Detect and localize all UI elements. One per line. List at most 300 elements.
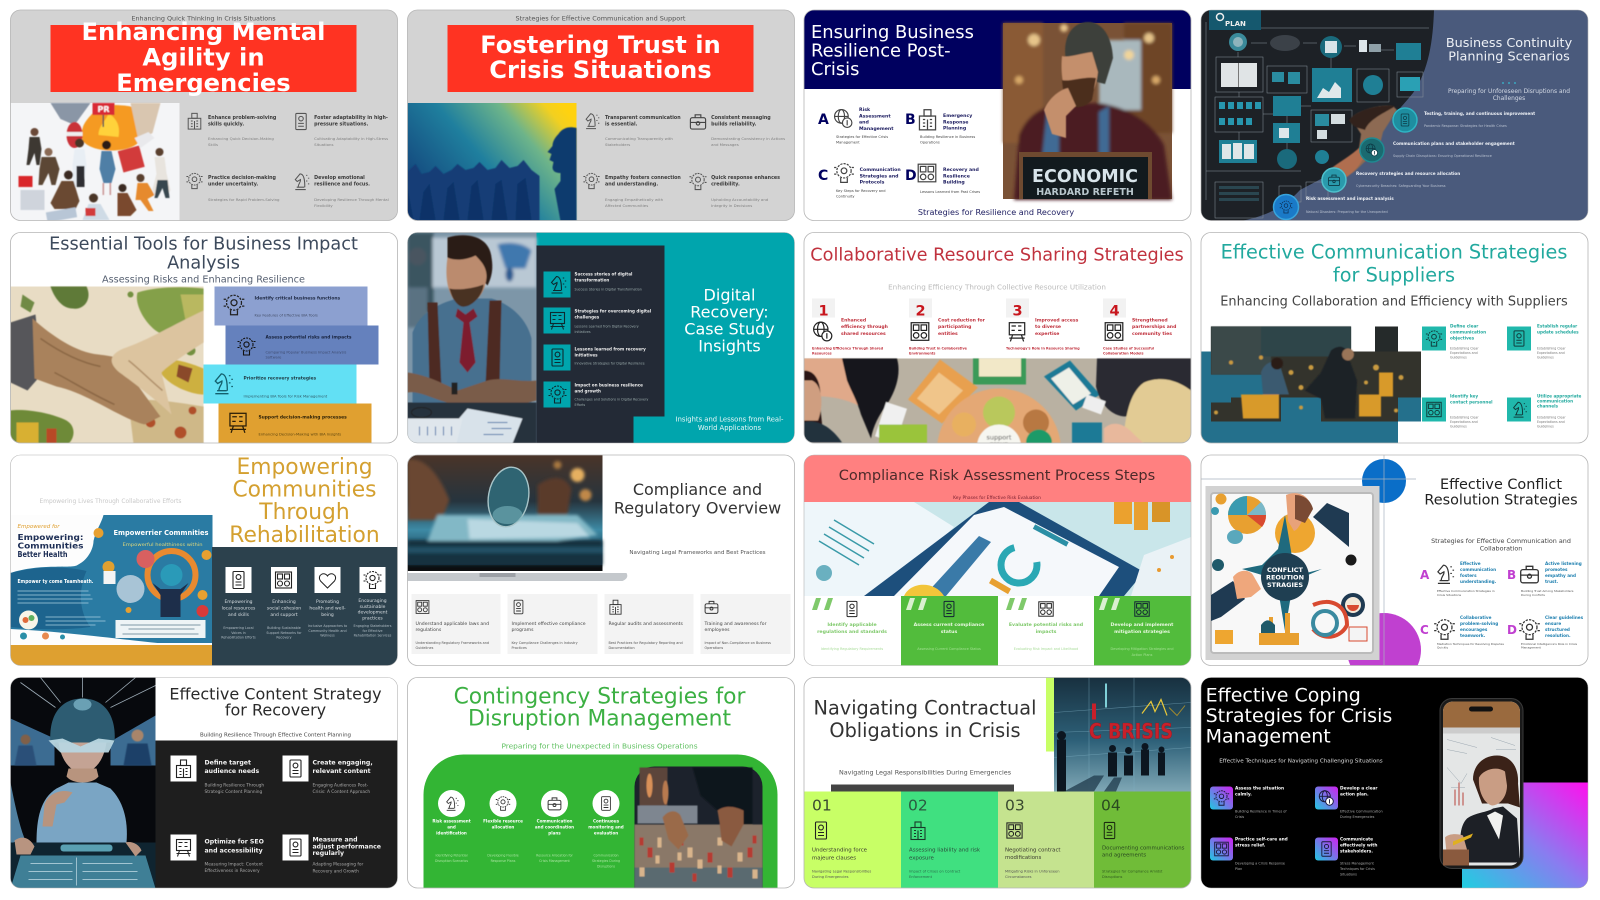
item: success stories: Success Stories in Digital Transformation: [574, 288, 642, 292]
item: flexible resources: allocation: [492, 824, 514, 830]
item: transparent communication: Communicating Transparently with: [605, 136, 673, 141]
item: contact personnel: Guidelines: [1450, 424, 1467, 428]
item: lessons learned: Lessons learned from recovery: [574, 346, 646, 352]
step: identify critical functions: Key Features of Effective BIA Tools: [254, 314, 318, 318]
item: communicate: stakeholders.: [1340, 848, 1373, 854]
item 1: Enhanced: [841, 318, 866, 324]
item: SEO: Measuring Impact: Content: [204, 862, 263, 868]
item: lessons learned: [544, 344, 646, 370]
illustration: tablet and documents: [804, 502, 1191, 596]
item: local resources: Empowering: [224, 599, 253, 605]
item: emotional resilience: [295, 174, 389, 208]
item B: [905, 110, 975, 144]
item: problem solving: [188, 113, 277, 147]
item: risk assessment: Natural Disasters: Preparing for the Unexpected: [1306, 210, 1388, 214]
step: support decisions: Support decision-making processes: [258, 414, 347, 420]
step: assess risks: Assess potential risks and impacts: [266, 334, 352, 340]
header: Compliance Risk Assessment Process Steps: [839, 468, 1155, 484]
item: engaging content: relevant content: [312, 768, 371, 775]
item: communication plans: Supply Chain Disruptions: Ensuring Operational Resilience: [1393, 154, 1492, 158]
item A: communication: [1460, 567, 1496, 572]
item: communication plans: plans: [548, 830, 561, 836]
item: emotional resilience: Developing Resilience Through Mental: [314, 197, 389, 202]
item: communicate: Situations: [1340, 872, 1357, 876]
item: appropriate channels: [1507, 394, 1582, 428]
title: Planning Scenarios: [1448, 50, 1570, 65]
poster: Empowerrier Commnities: [114, 529, 208, 537]
photo: worried man: ECONOMIC: [1032, 167, 1138, 187]
item 2: 2: [915, 304, 926, 320]
col 01: Understanding force: [812, 848, 868, 854]
navy header with title: Ensuring Business: [811, 22, 974, 43]
item: testing: Testing, training, and continuous improvement: [1424, 111, 1535, 116]
title: Rehabilitation: [229, 523, 380, 548]
item: update schedules: Establish regular: [1537, 324, 1578, 328]
photo: team around table: group: [990, 440, 1008, 448]
card 14: Contingency Strategies: [408, 678, 794, 888]
item: communicate: Techniques for Crisis: [1339, 867, 1375, 871]
item: recovery strategies: Cybersecurity Breaches: Safeguarding Your Business: [1356, 184, 1446, 188]
title banner: [50, 18, 356, 97]
item: risk assessment: and: [447, 824, 456, 830]
item: lessons learned: initiatives: [574, 352, 598, 357]
item: overcoming challenges: challenges: [574, 314, 600, 319]
item 2: Building Trust in Collaborative: [909, 346, 968, 350]
card: applicable laws: Understand applicable laws and: [416, 621, 489, 627]
subtitle: Empowering Lives Through Collaborative Efforts: [39, 499, 182, 505]
item: health: health and well-: [309, 605, 346, 611]
item 2: participating: [938, 324, 971, 330]
item 4: Collaboration Models: [1103, 352, 1143, 356]
title: Recovery:: [690, 302, 769, 322]
navy header with title: Resilience Post-: [811, 41, 951, 62]
item: update schedules: Guidelines: [1537, 356, 1554, 360]
item A: [1420, 561, 1497, 597]
item: appropriate channels: communication: [1537, 398, 1573, 404]
item: appropriate channels: Guidelines: [1537, 424, 1554, 428]
item C: [1420, 615, 1504, 650]
item: impact: Efforts: [574, 403, 586, 407]
item A: Strategies for Effective Crisis: [836, 135, 888, 139]
item: problem solving: Enhancing Quick Decision-Making: [208, 136, 274, 141]
item: testing: Pandemic Response: Strategies for Health Crises: [1424, 124, 1507, 128]
item: sustainable development: Rehabilitation Services: [354, 634, 392, 638]
col 04: Documenting communications: [1102, 846, 1185, 852]
item: sustainable development: Engaging Stakeholders: [354, 624, 392, 628]
item: sustainable development: Encouraging: [358, 598, 387, 604]
subtitle: Strategies for Resilience and Recovery: [918, 207, 1074, 217]
item 1: [812, 298, 888, 356]
item B: Operations: [920, 140, 940, 144]
item: consistent messaging: builds reliability.: [711, 122, 757, 128]
item C: C: [818, 168, 828, 184]
item B: Emergency: [943, 113, 972, 119]
dark chalkboard flow chart: [1201, 10, 1434, 221]
item D: Building: [943, 180, 965, 186]
item: risk assessment: identification: [436, 830, 467, 836]
item D: Lessons Learned from Past Crises: [920, 190, 980, 194]
item: define audience: Strategic Content Planning: [204, 789, 263, 795]
illustration: crisis scene: [10, 103, 180, 222]
item A: Management: [836, 140, 860, 144]
item: overcoming challenges: [544, 308, 652, 334]
step: support decisions: Enhancing Decision-Making with BIA Insights: [258, 432, 341, 436]
title: Contingency Strategies for: [454, 684, 745, 710]
title banner: Emergencies: [116, 69, 291, 97]
item C: Collaborative: [1460, 615, 1492, 620]
item: define objectives: communication: [1450, 330, 1486, 334]
item: assess calmly: Crisis: [1235, 815, 1244, 819]
item: self care: stress relief.: [1235, 842, 1266, 848]
item: assess calmly: [1210, 786, 1287, 819]
item: transparent communication: [586, 114, 681, 147]
item: consistent messaging: Demonstrating Consistency in Actions: [711, 136, 785, 141]
item B: trust.: [1545, 579, 1559, 584]
col 02: Enforcement: [909, 875, 933, 879]
item: communicate: Communicate: [1340, 836, 1373, 842]
item: overcoming challenges: Lessons Learned from Digital Recovery: [574, 324, 639, 328]
step: mitigate: Developing Mitigation Strategies and: [1110, 647, 1174, 651]
title: Effective Communication Strategies: [1221, 240, 1567, 264]
item D: Management: [1521, 646, 1542, 650]
item: measure: regularly: [312, 850, 344, 857]
step: assess: Assessing Current Compliance Status: [917, 647, 981, 651]
item: empathy: Empathy fosters connection: [605, 175, 681, 181]
item: health: being: [321, 612, 334, 618]
item D: resolution.: [1545, 633, 1571, 638]
col 02: exposure: [909, 856, 934, 862]
step: identify critical functions: [214, 286, 368, 326]
decorative circles: [1347, 459, 1421, 687]
col 01: [804, 792, 901, 888]
teal block: [1201, 352, 1398, 444]
item D: [905, 164, 980, 194]
step: evaluate: [998, 596, 1094, 666]
item: emotional resilience: Flexibility: [314, 203, 333, 208]
item A: and: [859, 120, 869, 126]
card: compliance programs: Key Compliance Challenges in Industry: [512, 641, 578, 645]
item: quick response: credibility.: [711, 182, 740, 188]
item: sustainable development: for Effective: [363, 629, 382, 633]
step: evaluate: impacts: [1036, 629, 1057, 635]
item: risk assessment: [432, 790, 471, 863]
item: contact personnel: Establishing Clear: [1450, 416, 1479, 420]
item: communication plans: and coordination: [535, 824, 574, 830]
illustration: crisis scene: PR: [98, 105, 110, 114]
card 15: Navigating Contractual Obligations: [804, 678, 1191, 888]
item: communicate: Stress Management: [1340, 862, 1375, 866]
item: define audience: Building Resilience Through: [204, 782, 264, 788]
item: sustainable development: practices: [362, 615, 383, 621]
item: lessons learned: Innovative Strategies for Digital Resilience: [574, 362, 645, 366]
card 13: Effective Content Strategy: [10, 678, 398, 888]
subtitle: World Applications: [698, 424, 762, 432]
item: health: Wellness: [320, 634, 335, 638]
item: sustainable development: [354, 567, 392, 638]
title banner: Enhancing Mental: [82, 18, 325, 46]
photo: team around table: [804, 358, 1191, 512]
photo: stressed man at desk: [408, 232, 536, 444]
item: SEO: and accessibility: [204, 848, 263, 854]
item: appropriate channels: Expectations and: [1537, 420, 1565, 424]
item: define objectives: [1422, 324, 1486, 360]
item: success stories: Success stories of digital: [574, 272, 633, 276]
item 1: Resources: [812, 352, 832, 356]
step: prioritize recovery: [204, 364, 356, 404]
item: social cohesion: and support: [270, 612, 298, 618]
step: assess: [901, 596, 998, 666]
subtitle: Enhancing Collaboration and Efficiency with Suppliers: [1220, 294, 1568, 310]
item: self care: [1210, 836, 1288, 871]
item A: Risk: [859, 107, 871, 113]
card: training: employees: [704, 627, 730, 633]
item: communication plans: [535, 790, 574, 863]
item: define audience: Define target: [204, 760, 251, 766]
title banner: Agility in: [142, 44, 265, 72]
item 4: community ties: [1132, 331, 1172, 337]
photo: meeting puzzle: [1211, 326, 1421, 422]
item: risk assessment: Risk assessment and impact analysis: [1306, 196, 1394, 201]
item: decision making: [186, 173, 280, 202]
title: Business Continuity: [1446, 36, 1573, 51]
card: compliance programs: [508, 594, 598, 654]
item C: Protocols: [860, 180, 885, 186]
item 3: 3: [1012, 304, 1023, 320]
item: monitoring: Continuous: [593, 818, 620, 824]
poster: [1206, 486, 1380, 660]
step: evaluate: Evaluate potential risks and: [1009, 622, 1083, 628]
item: social cohesion: [266, 567, 302, 640]
step: prioritize recovery: Implementing BIA Tools for Risk Management: [244, 394, 328, 398]
item 3: to diverse: [1035, 324, 1061, 330]
poster: Empower ty come Teamheath.: [18, 579, 94, 585]
card 8: Effective Communication for Suppliers: [1201, 232, 1588, 444]
item: self care: Practice self-care and: [1235, 836, 1288, 842]
item 2: Cost reduction for: [938, 318, 986, 324]
title banner: Fostering Trust in: [480, 31, 721, 59]
item 4: partnerships and: [1132, 324, 1176, 330]
title: Through: [258, 500, 350, 525]
subtitle: Building Resilience Through Effective Content Planning: [200, 732, 351, 738]
title: Regulatory Overview: [614, 498, 781, 517]
title: Analysis: [167, 254, 240, 274]
title: Insights: [698, 336, 761, 356]
subtitle: Preparing for Unforeseen Disruptions and: [1448, 89, 1570, 95]
item: local resources: Rehabilitation Efforts: [221, 636, 256, 640]
item 2: entities: [938, 331, 958, 337]
item: local resources: [221, 567, 256, 640]
dark panel: [156, 740, 398, 888]
item: success stories: [544, 272, 642, 298]
card 2: Fostering Trust: [408, 10, 794, 226]
item D: Clear guidelines: [1545, 615, 1584, 620]
item: risk assessment: Identifying Potential: [436, 854, 468, 858]
item: define objectives: Define clear: [1450, 324, 1479, 328]
item: decision making: Practice decision-making: [208, 175, 277, 181]
title banner: [448, 25, 754, 92]
item: define audience: audience needs: [204, 768, 259, 775]
card: compliance programs: Practices: [512, 646, 527, 650]
item: measure: Measure and: [312, 836, 358, 844]
subtitle: Preparing for the Unexpected in Business Operations: [501, 742, 698, 750]
item: contact personnel: Identify key: [1450, 394, 1478, 398]
item: local resources: local resources: [222, 605, 256, 611]
card 3: Ensuring Business Resilience: [804, 10, 1191, 221]
step: identify: regulations and standards: [817, 629, 887, 635]
step: assess risks: Comparing Popular Business Impact Analysis: [266, 350, 346, 354]
item: health: Community Health and: [308, 629, 347, 633]
item: monitoring: Disruptions: [597, 864, 615, 868]
item C: Communication: [860, 167, 901, 173]
navy header with title: Crisis: [811, 59, 859, 80]
subtitle: Navigating Legal Responsibilities During Emergencies: [839, 768, 1012, 776]
dots: [1502, 82, 1516, 84]
title: Management: [1206, 726, 1331, 748]
col 03: [998, 792, 1094, 888]
item: define objectives: Guidelines: [1450, 356, 1467, 360]
item: adaptability: pressure situations.: [314, 122, 369, 128]
item: communicate: effectively with: [1340, 842, 1377, 848]
card 12: Effective Conflict Resolution: [1201, 455, 1588, 687]
step: assess risks: [226, 326, 378, 364]
item: contact personnel: contact personnel: [1450, 400, 1493, 404]
poster: CONFLICT: [1267, 566, 1304, 574]
item A: [818, 107, 894, 144]
card 10: Compliance and Regulatory: [408, 455, 794, 666]
item: transparent communication: Stakeholders: [605, 142, 630, 147]
col 02: [901, 792, 998, 888]
item: action plan: Effective Communication: [1340, 810, 1383, 814]
photo: worried man: HARDARD REFETH: [1036, 187, 1134, 198]
title: Communities: [232, 478, 377, 503]
item D: ensure: [1545, 621, 1561, 626]
item: SEO: Optimize for SEO: [204, 838, 264, 846]
step: assess risks: Software: [266, 355, 282, 359]
item: update schedules: [1507, 324, 1579, 360]
lime accent bar: [1046, 678, 1054, 752]
item 1: efficiency through: [841, 324, 888, 330]
item: problem solving: Enhance problem-solving: [208, 115, 277, 121]
item: problem solving: skills quickly.: [208, 122, 244, 128]
item A: A: [1420, 568, 1430, 582]
item A: Management: [859, 126, 894, 132]
item: monitoring: monitoring and: [588, 824, 624, 830]
item B: [1507, 561, 1582, 597]
item: engaging content: Crisis: A Content Approach: [312, 789, 370, 795]
item: define objectives: Establishing Clear: [1450, 346, 1479, 350]
item C: Quickly: [1437, 646, 1448, 650]
item C: Mediation Techniques for Resolving Disputes: [1437, 642, 1504, 646]
item B: Active listening: [1545, 561, 1582, 566]
subtitle: Enhancing Quick Thinking in Crisis Situations: [131, 14, 276, 22]
item: emotional resilience: resilience and focus.: [314, 182, 370, 188]
col 04: Strategies for Compliance Amidst: [1102, 870, 1163, 874]
gradient block: [1462, 782, 1588, 888]
item 2: Environments: [909, 352, 935, 356]
item: adaptability: Cultivating Adaptability in High-Stress: [314, 136, 388, 141]
item: flexible resources: [483, 790, 523, 863]
photo: crisis graphic: [1054, 678, 1191, 792]
item: testing: [1393, 108, 1535, 132]
card: training: Operations: [704, 646, 723, 650]
title: Compliance and: [633, 480, 762, 499]
item: quick response: Integrity in Decisions: [711, 203, 752, 208]
item: engaging content: Create engaging,: [312, 760, 373, 766]
dark chalkboard flow chart: PLAN: [1225, 20, 1246, 28]
item: adaptability: [296, 113, 388, 147]
item 3: [1006, 298, 1080, 350]
card 6: Digital Recovery: [408, 232, 794, 444]
card: training: Training and awareness for: [704, 621, 767, 627]
item: impact: and growth: [574, 388, 601, 393]
item 3: Technology's Role in Resource Sharing: [1006, 346, 1080, 350]
card: compliance programs: Implement effective compliance: [512, 621, 586, 627]
col 03: 03: [1005, 796, 1025, 814]
photo: woman with visor: [10, 678, 156, 888]
item: risk assessment: Disruption Scenarios: [435, 859, 468, 863]
poster: STRAGIES: [1267, 581, 1303, 589]
step: prioritize recovery: Prioritize recovery strategies: [244, 376, 316, 382]
card: audits: Best Practices for Regulatory Reporting and: [608, 641, 683, 645]
item B: empathy and: [1545, 573, 1576, 578]
item: update schedules: Expectations and: [1537, 351, 1565, 355]
item B: B: [905, 112, 916, 128]
item 4: 4: [1109, 304, 1120, 320]
item: recovery strategies: Recovery strategies and resource allocation: [1356, 171, 1460, 176]
item A: fosters: [1460, 573, 1477, 578]
item B: B: [1507, 568, 1516, 582]
item B: Response: [943, 119, 968, 125]
item D: [1507, 615, 1584, 650]
item: action plan: Develop a clear: [1340, 786, 1378, 792]
step: identify: Identify applicable: [827, 622, 877, 628]
step: assess: status: [941, 629, 957, 635]
title: Effective Coping: [1206, 684, 1361, 706]
item: contact personnel: [1422, 394, 1493, 428]
title: Empowering: [236, 455, 373, 480]
item: appropriate channels: Establishing Clear: [1537, 416, 1566, 420]
item 3: Improved access: [1035, 318, 1079, 324]
card 7: Collaborative Resource Sharing: [804, 232, 1191, 512]
item D: structured: [1545, 627, 1570, 632]
item: empathy: Engaging Empathetically with: [605, 197, 664, 202]
item B: promotes: [1545, 567, 1568, 572]
poster: Empowerful healthiness within: [122, 542, 203, 548]
photo: hands over city model: [634, 766, 762, 888]
item: quick response: Quick response enhances: [711, 175, 780, 181]
title: Disruption Management: [468, 707, 731, 732]
item: measure: Adapting Messaging for: [312, 862, 363, 868]
phone with woman photo: [1440, 698, 1523, 868]
item: social cohesion: Support Networks for: [266, 631, 302, 635]
subtitle: Challenges: [1493, 96, 1525, 102]
item: monitoring: Strategies During: [592, 859, 620, 863]
item: quick response: Upholding Accountability and: [711, 197, 769, 202]
man peering at chart: [1329, 106, 1397, 182]
item D: Emotional Intelligence's Role in Crisis: [1521, 642, 1577, 646]
card: applicable laws: regulations: [416, 627, 442, 633]
item: assess calmly: calmly.: [1235, 792, 1252, 798]
item: risk assessment: [1274, 194, 1394, 220]
item 2: [909, 298, 986, 356]
item 1: shared resources: [841, 331, 886, 337]
card 5: Essential Tools for BIA: [10, 232, 398, 444]
col 02: Assessing liability and risk: [909, 848, 981, 854]
item 4: Strengthened: [1132, 318, 1168, 324]
item: engaging content: [282, 756, 373, 795]
item: monitoring: [588, 790, 624, 868]
step: support decisions: [218, 404, 372, 444]
